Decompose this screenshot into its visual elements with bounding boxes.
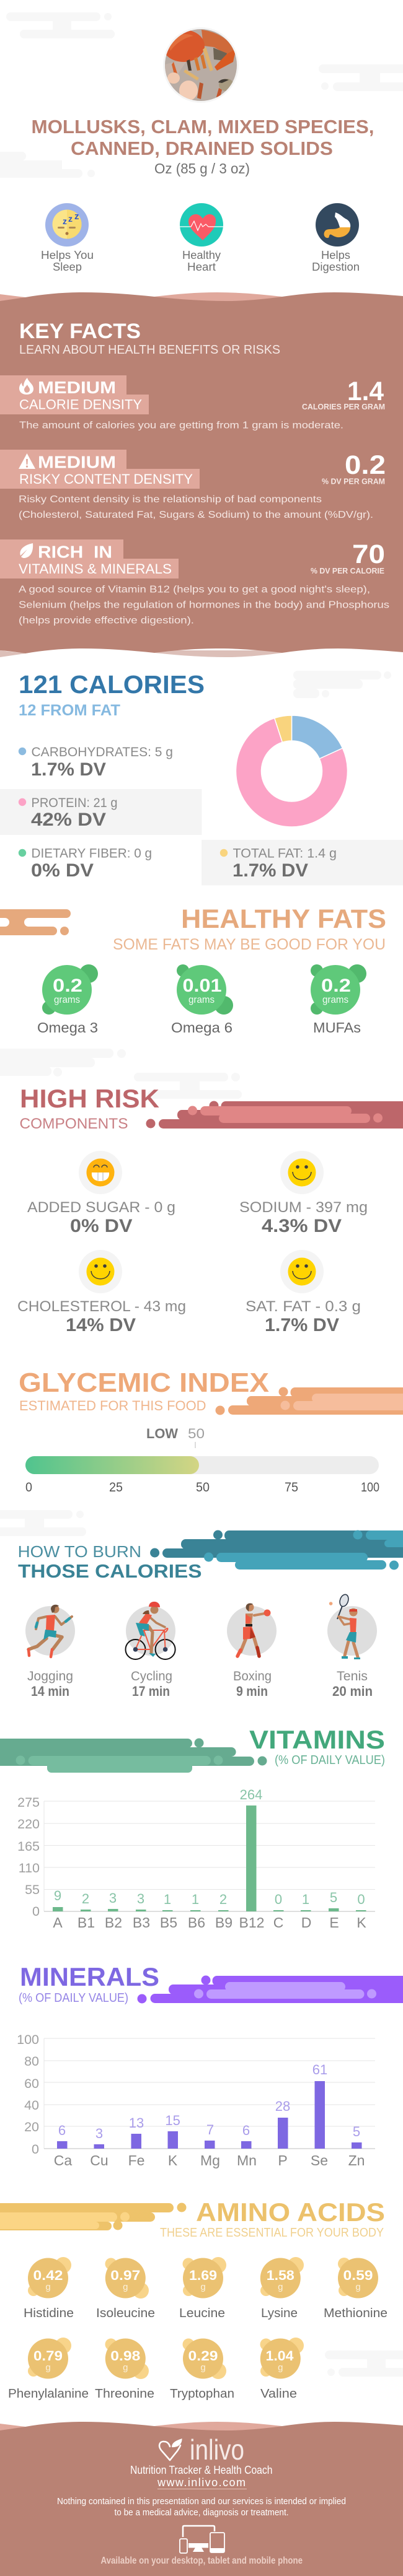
bar chart: minerals: K	[168, 2152, 178, 2168]
fact: rich in vitamins and minerals: 70	[352, 539, 385, 569]
fat: MUFAs: 0.2	[321, 976, 351, 996]
amino: methionine: Methionine	[324, 2307, 388, 2320]
icon: sleeping face: z	[74, 211, 79, 222]
benefit: helps you sleep: Sleep	[53, 261, 82, 273]
icon: sleeping face: z	[68, 214, 73, 224]
benefit: helps you sleep	[41, 203, 94, 273]
heading: how to burn: HOW TO BURN	[18, 1542, 141, 1561]
bar chart: vitamins: B6	[188, 1915, 205, 1931]
section decor: burn calories	[150, 1530, 403, 1570]
fat: MUFAs	[311, 964, 366, 1036]
risk: cholesterol: 14% DV	[66, 1315, 136, 1335]
activity: boxing: Boxing	[233, 1669, 272, 1683]
glycemic gauge	[25, 1426, 379, 1495]
bar chart: vitamins: 264	[240, 1787, 262, 1802]
amino: phenylalanine: g	[45, 2362, 51, 2373]
fat: omega 6: 0.01	[182, 976, 222, 996]
amino: leucine: g	[200, 2282, 206, 2292]
fact: calorie density: CALORIE DENSITY	[19, 396, 142, 413]
risk: cholesterol: CHOLESTEROL - 43 mg	[17, 1298, 186, 1315]
risk: added sugar: 0% DV	[70, 1216, 133, 1236]
amino: isoleucine	[96, 2258, 155, 2320]
bar chart: vitamins: B5	[160, 1915, 177, 1931]
fat: omega 3	[37, 964, 98, 1036]
amino: lysine: 1.58	[267, 2268, 294, 2283]
risk: cholesterol	[17, 1250, 186, 1335]
amino: phenylalanine	[8, 2338, 89, 2401]
subheading: vitamins daily value: (% OF DAILY VALUE)	[275, 1753, 385, 1767]
bar chart: minerals: Fe	[128, 2152, 144, 2168]
title	[31, 116, 374, 159]
icon: devices	[180, 2526, 224, 2553]
amino: histidine	[24, 2257, 74, 2320]
disclaimer	[57, 2496, 346, 2518]
legend: carbohydrates	[19, 745, 173, 780]
amino: histidine: Histidine	[24, 2307, 74, 2320]
heading: healthy fats: HEALTHY FATS	[181, 904, 386, 934]
fact: rich in vitamins and minerals: VITAMINS & MINERALS	[19, 561, 172, 577]
icon: smiling face	[79, 1250, 122, 1293]
subheading: components: COMPONENTS	[20, 1116, 128, 1132]
risk: saturated fat	[246, 1250, 361, 1335]
icon: warning triangle	[19, 453, 35, 469]
icon: tennis player	[327, 1593, 377, 1659]
icon: grinning face	[79, 1151, 122, 1194]
amino: threonine	[95, 2339, 154, 2401]
donut chart: macronutrient split	[236, 715, 347, 827]
fat: MUFAs: MUFAs	[313, 1019, 361, 1036]
bar chart: minerals: Ca	[54, 2152, 72, 2168]
benefit: helps digestion	[312, 203, 360, 273]
legend: dietary fiber	[19, 846, 152, 881]
fat: omega 6	[171, 964, 233, 1036]
bar chart: minerals: 61	[312, 2062, 327, 2077]
amino: valine	[260, 2338, 304, 2401]
amino: tryptophan: g	[200, 2362, 206, 2373]
activity: boxing: 9 min	[236, 1683, 268, 1699]
amino: leucine	[179, 2257, 226, 2320]
legend: total fat	[220, 846, 337, 881]
amino: phenylalanine: Phenylalanine	[8, 2387, 89, 2401]
fact: calorie density: 1.4	[347, 377, 384, 406]
fact: risky content density: (Cholesterol, Saturated Fat, Sugars & Sodium) to the amount (%DV/gr).	[19, 510, 373, 520]
bar chart: minerals: 7	[206, 2122, 214, 2137]
fat: omega 3: Omega 3	[37, 1019, 98, 1036]
amino: threonine: g	[123, 2362, 128, 2373]
bar chart: vitamins: B3	[133, 1915, 150, 1931]
glycemic gauge: 25	[109, 1480, 123, 1495]
heading: minerals: MINERALS	[20, 1962, 159, 1991]
subheading: estimated: ESTIMATED FOR THIS FOOD	[19, 1398, 206, 1413]
amino: isoleucine: Isoleucine	[96, 2307, 155, 2320]
icon: sleeping face	[45, 203, 89, 247]
icon: flame	[19, 378, 33, 395]
amino: methionine: 0.59	[343, 2268, 373, 2283]
legend row backgrounds	[0, 789, 403, 886]
activity: jogging: Jogging	[27, 1669, 73, 1683]
bar chart: vitamins: 3	[109, 1890, 117, 1906]
risk: added sugar: ADDED SUGAR - 0 g	[27, 1199, 175, 1216]
bar chart: vitamins: D	[301, 1915, 311, 1931]
bar chart: minerals: 6	[58, 2123, 66, 2138]
bar chart: minerals: Mg	[200, 2152, 220, 2168]
amino: threonine: Threonine	[95, 2387, 154, 2401]
bar chart: vitamins: 110	[19, 1861, 40, 1875]
benefit: healthy heart	[180, 203, 223, 273]
fat: MUFAs: grams	[322, 995, 348, 1005]
title: MOLLUSKS, CLAM, MIXED SPECIES,	[31, 116, 374, 138]
amino: histidine: g	[45, 2282, 51, 2292]
glycemic gauge: 75	[285, 1480, 298, 1495]
icon: smiling face	[280, 1250, 324, 1293]
bar chart: minerals: 40	[24, 2098, 39, 2113]
header: food photo	[163, 27, 239, 103]
bar chart: minerals: Cu	[90, 2152, 108, 2168]
section decor: amino acids	[0, 2203, 186, 2230]
bar chart: minerals: 28	[275, 2098, 290, 2114]
bar chart: minerals: 60	[24, 2076, 39, 2091]
activity: boxing	[227, 1603, 277, 1699]
fact: risky content density: 0.2	[345, 450, 386, 480]
legend: protein: 42% DV	[31, 810, 106, 830]
section decor: glycemic index	[216, 1387, 403, 1415]
website: www.inlivo.com	[157, 2476, 246, 2489]
legend: dietary fiber: DIETARY FIBER: 0 g	[31, 846, 152, 861]
activity: cycling: 17 min	[132, 1683, 170, 1699]
activity: tennis: Tenis	[337, 1669, 368, 1683]
bar chart: vitamins: B1	[78, 1915, 95, 1931]
amino: valine: 1.04	[265, 2348, 294, 2364]
amino: lysine	[260, 2257, 304, 2320]
amino: lysine: g	[278, 2282, 283, 2292]
icon: heart with pulse	[180, 203, 223, 247]
amino: histidine: 0.42	[33, 2268, 63, 2283]
legend: carbohydrates: CARBOHYDRATES: 5 g	[31, 745, 173, 759]
risk: sodium	[239, 1151, 368, 1236]
glycemic gauge: 100	[361, 1480, 379, 1495]
amino: tryptophan	[170, 2339, 234, 2401]
panel: key facts	[0, 292, 403, 657]
fact: rich in vitamins and minerals: (helps provide effective digestion).	[19, 616, 194, 626]
bar chart: minerals: 6	[242, 2123, 250, 2138]
fact: risky content density: Risky Content density is the relationship of bad components	[19, 494, 322, 505]
amino: lysine: Lysine	[261, 2307, 298, 2320]
fat: omega 6: grams	[188, 995, 215, 1005]
bar chart: vitamins: K	[356, 1915, 366, 1931]
amino: leucine: 1.69	[189, 2268, 217, 2283]
heading: calories: 121 CALORIES	[19, 670, 205, 699]
bar chart: vitamins: 2	[219, 1892, 227, 1907]
bar chart: minerals: 100	[17, 2032, 39, 2047]
fact: rich in vitamins and minerals: Selenium (helps the regulation of hormones in the body) and Phosphorus	[19, 600, 389, 611]
bar chart: vitamins: A	[53, 1915, 63, 1931]
bar chart: minerals: Se	[311, 2152, 328, 2168]
subheading: LEARN ABOUT HEALTH BENEFITS OR RISKS	[19, 343, 280, 357]
legend: protein: PROTEIN: 21 g	[31, 796, 118, 810]
fact: rich in vitamins and minerals	[0, 539, 389, 626]
title: CANNED, DRAINED SOLIDS	[71, 138, 333, 159]
fact: risky content density: RISKY CONTENT DENSITY	[19, 471, 193, 487]
benefit: helps digestion: Digestion	[312, 261, 360, 273]
tagline: Nutrition Tracker & Health Coach	[130, 2464, 273, 2476]
bar chart: vitamins: 1	[164, 1892, 171, 1907]
fact: risky content density: % DV PER GRAM	[322, 477, 385, 486]
fact: risky content density	[0, 450, 386, 520]
bar chart: vitamins: 220	[17, 1817, 40, 1832]
fat: omega 3: 0.2	[53, 976, 82, 996]
bar chart: minerals: 15	[165, 2113, 180, 2128]
legend: dietary fiber: 0% DV	[31, 860, 94, 881]
bar chart: minerals: P	[278, 2152, 288, 2168]
bar chart: vitamins: 275	[17, 1795, 40, 1810]
activity: jogging: 14 min	[31, 1683, 69, 1699]
subheading: healthy fats: SOME FATS MAY BE GOOD FOR YOU	[113, 936, 386, 953]
risk: added sugar	[27, 1151, 175, 1236]
disclaimer: Nothing contained in this presentation and our services is intended or implied	[57, 2496, 346, 2507]
bar chart: vitamins: 5	[330, 1890, 337, 1905]
fact: calorie density: MEDIUM	[38, 378, 116, 397]
legend: carbohydrates: 1.7% DV	[31, 759, 106, 780]
benefit: healthy heart: Healthy	[182, 249, 221, 261]
section decor: healthy fats	[0, 909, 71, 935]
fat: omega 3: grams	[54, 995, 80, 1005]
amino: threonine: 0.98	[110, 2348, 140, 2364]
heading: amino acids: AMINO ACIDS	[196, 2198, 385, 2227]
heading: vitamins: VITAMINS	[249, 1725, 385, 1754]
amino: tryptophan: 0.29	[188, 2348, 218, 2364]
fact: rich in vitamins and minerals: A good source of Vitamin B12 (helps you to get a good night's sleep),	[19, 585, 370, 595]
fact: calorie density	[0, 375, 385, 431]
bar chart: vitamins: C	[273, 1915, 283, 1931]
bar chart: vitamins: 0	[275, 1892, 282, 1907]
fact: calorie density: The amount of calories you are getting from 1 gram is moderate.	[19, 420, 343, 431]
fact: risky content density: MEDIUM	[38, 452, 116, 472]
bar chart: minerals	[17, 2032, 375, 2168]
section decor: vitamins	[0, 1738, 267, 1773]
activity: cycling: Cycling	[131, 1669, 172, 1683]
heading: high risk: HIGH RISK	[20, 1084, 159, 1113]
amino: methionine	[324, 2258, 388, 2320]
bar chart: vitamins: B2	[105, 1915, 122, 1931]
risk: saturated fat: SAT. FAT - 0.3 g	[246, 1298, 361, 1315]
amino: methionine: g	[355, 2282, 361, 2292]
subheading: minerals daily value: (% OF DAILY VALUE)	[19, 1991, 128, 2005]
bar chart: vitamins: 0	[357, 1892, 365, 1907]
bar chart: minerals: 13	[129, 2115, 144, 2131]
bar chart: minerals: 80	[24, 2054, 39, 2069]
legend: protein	[19, 796, 117, 830]
bar chart: minerals: 5	[353, 2124, 360, 2139]
bar chart: minerals: Mn	[237, 2152, 257, 2168]
glycemic gauge: 0	[25, 1480, 32, 1495]
footer panel	[0, 2422, 403, 2576]
icon: leaf	[20, 543, 33, 558]
heading: those calories: THOSE CALORIES	[18, 1560, 202, 1582]
fact: rich in vitamins and minerals: % DV PER CALORIE	[311, 566, 384, 575]
bar chart: vitamins	[17, 1787, 375, 1931]
bar chart: vitamins: 55	[25, 1882, 40, 1897]
amino: leucine: Leucine	[179, 2307, 225, 2320]
activity: cycling	[125, 1602, 175, 1699]
icon: boxer	[227, 1603, 277, 1656]
logo: inlivo	[159, 2434, 244, 2466]
icon: stomach	[316, 203, 359, 247]
bar chart: minerals: 20	[24, 2120, 39, 2134]
risk: saturated fat: 1.7% DV	[265, 1315, 339, 1335]
icon: sleeping face: z	[63, 216, 67, 226]
activity: jogging	[25, 1605, 75, 1699]
heading: key facts: KEY FACTS	[19, 320, 141, 343]
amino: phenylalanine: 0.79	[33, 2348, 63, 2364]
serving size: Oz (85 g / 3 oz)	[154, 160, 250, 177]
bar chart: vitamins: 1	[192, 1892, 199, 1907]
legend: total fat: TOTAL FAT: 1.4 g	[233, 846, 337, 861]
fact: rich in vitamins and minerals: RICH IN	[38, 543, 112, 561]
amino: valine: g	[278, 2362, 283, 2373]
subheading: from fat: 12 FROM FAT	[19, 702, 120, 719]
bar chart: vitamins: B9	[215, 1915, 232, 1931]
risk: sodium: 4.3% DV	[262, 1216, 342, 1236]
bar chart: minerals: Zn	[348, 2152, 365, 2168]
section decor: minerals	[138, 1976, 403, 2003]
icon: smiling face	[280, 1151, 324, 1194]
benefit: helps digestion: Helps	[321, 249, 350, 261]
bar chart: vitamins: B12	[239, 1915, 264, 1931]
bar chart: vitamins: 1	[302, 1892, 309, 1907]
glycemic gauge: 50	[188, 1426, 205, 1441]
bar chart: vitamins: 3	[137, 1891, 144, 1906]
availability note: Available on your desktop, tablet and mobile phone	[100, 2556, 303, 2566]
fact: calorie density: CALORIES PER GRAM	[302, 402, 385, 411]
subheading: amino acids: THESE ARE ESSENTIAL FOR YOUR BODY	[160, 2226, 384, 2240]
bar chart: minerals: 3	[95, 2126, 103, 2141]
bar chart: vitamins: 9	[54, 1888, 61, 1903]
amino: isoleucine: 0.97	[110, 2268, 140, 2283]
bar chart: minerals: 0	[32, 2142, 39, 2157]
legend: total fat: 1.7% DV	[232, 860, 308, 881]
benefit: healthy heart: Heart	[187, 261, 216, 273]
activity: tennis: 20 min	[332, 1683, 373, 1699]
amino: valine: Valine	[260, 2387, 297, 2401]
heading: glycemic index: GLYCEMIC INDEX	[19, 1368, 269, 1398]
glycemic gauge: 50	[196, 1480, 210, 1495]
fat: omega 6: Omega 6	[171, 1019, 232, 1036]
disclaimer: to be a medical advice, diagnosis or treatment.	[114, 2507, 289, 2518]
amino: isoleucine: g	[123, 2282, 128, 2292]
icon: cyclist	[125, 1602, 175, 1659]
glycemic gauge: LOW	[146, 1426, 178, 1441]
activity: tennis	[327, 1593, 377, 1699]
bar chart: vitamins: 2	[82, 1891, 89, 1906]
bar chart: vitamins: E	[329, 1915, 339, 1931]
amino: tryptophan: Tryptophan	[170, 2387, 234, 2401]
logo: inlivo: inlivo	[190, 2434, 244, 2466]
risk: sodium: SODIUM - 397 mg	[239, 1199, 368, 1216]
section decor: high risk	[146, 1101, 403, 1129]
bar chart: vitamins: 165	[17, 1839, 40, 1854]
bar chart: vitamins: 0	[32, 1904, 40, 1919]
icon: jogger	[25, 1605, 75, 1657]
benefit: helps you sleep: Helps You	[41, 249, 94, 261]
